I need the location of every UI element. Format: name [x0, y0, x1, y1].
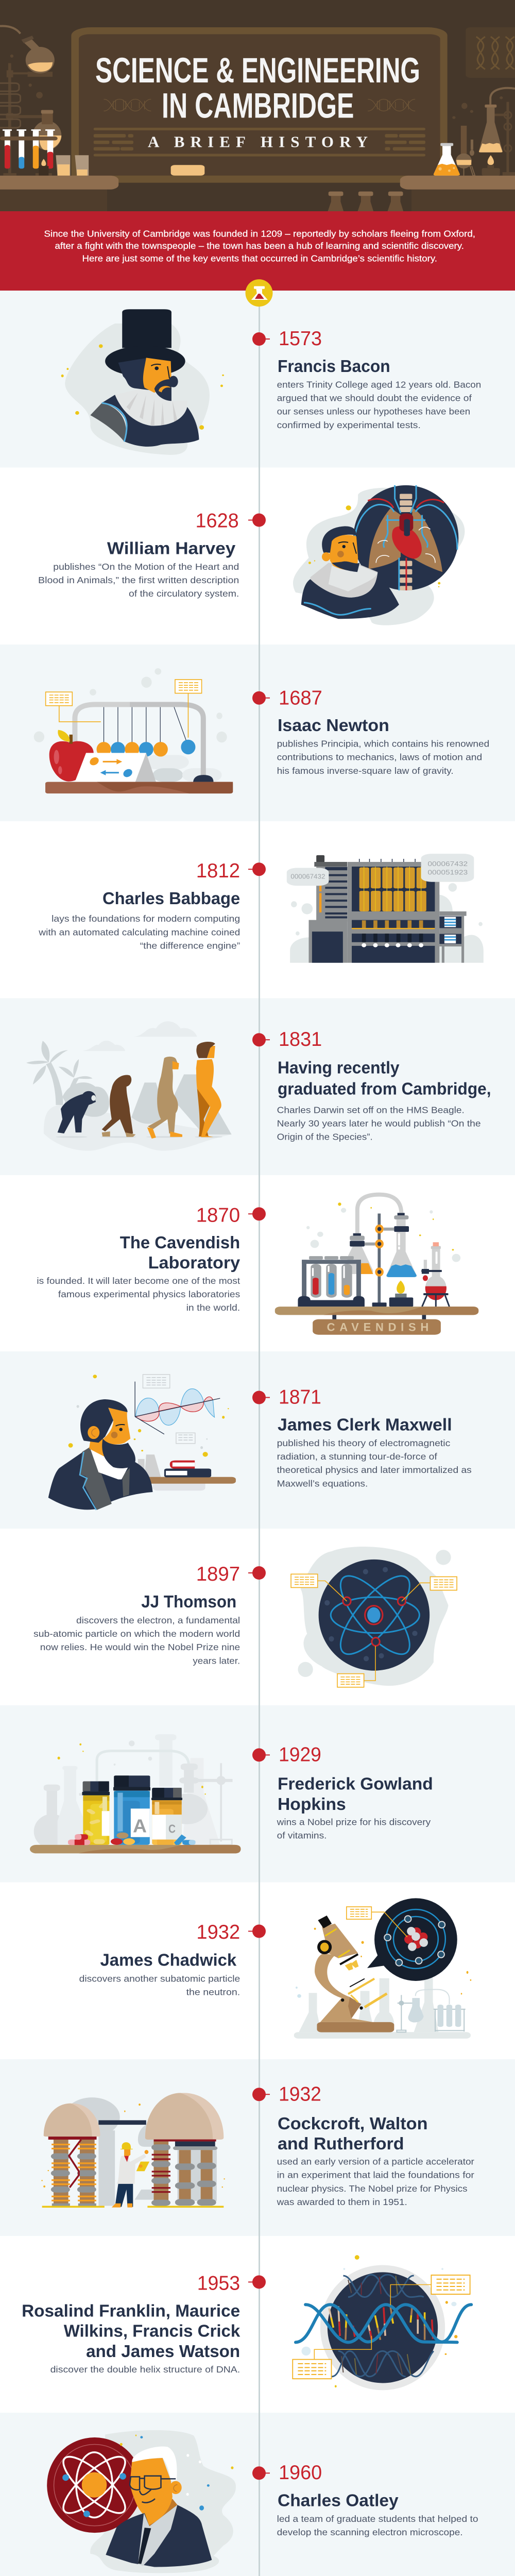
- title: [95, 50, 420, 126]
- icon: timeline dot: [248, 862, 266, 876]
- text block: enters Trinity College aged 12 years old. Bacon: [277, 379, 481, 389]
- text block: lays the foundations for modern computing: [52, 913, 240, 924]
- text block: theoretical physics and later immortalized as: [277, 1465, 472, 1475]
- left apparatus: [0, 26, 21, 33]
- panel: 1573 Francis Bacon: [61, 309, 481, 455]
- icon: timeline dot: [252, 2088, 270, 2101]
- text block: sub-atomic particle on which the modern world: [33, 1629, 240, 1639]
- text block: Origin of the Species”.: [277, 1132, 373, 1142]
- year: 1573: [279, 328, 322, 350]
- text block: [277, 739, 489, 776]
- heading: Wilkins, Francis Crick: [64, 2321, 241, 2341]
- year: 1687: [279, 687, 322, 709]
- text block: in the world.: [186, 1302, 240, 1313]
- icon: timeline start flask pin: [245, 279, 273, 307]
- year: 1932: [279, 2083, 321, 2105]
- illustration: laboratory apparatus on shelf: CAVENDISH: [327, 1321, 428, 1334]
- heading: Having recently: [278, 1058, 400, 1077]
- text block: [277, 1817, 431, 1841]
- heading: JJ Thomson: [141, 1592, 236, 1611]
- intro text: Since the University of Cambridge was founded in 1209 – reportedly by scholars fleeing from Oxford,: [44, 229, 475, 239]
- header: lab scene with chalkboard: [0, 0, 515, 211]
- panel: 1932 Cockcroft, Walton and Rutherford: [41, 2083, 474, 2208]
- icon: timeline dot: [248, 1207, 266, 1221]
- floor and benches: [0, 183, 515, 211]
- icon: timeline dot: [248, 2275, 266, 2289]
- text block: discover the double helix structure of DNA.: [50, 2364, 240, 2375]
- heading: Hopkins: [278, 1794, 346, 1814]
- illustration: James Clerk Maxwell and electromagnetic wave: [48, 1375, 236, 1510]
- text block: nuclear physics. The Nobel prize for Physics: [277, 2183, 468, 2194]
- illustration: Francis Bacon portrait: [61, 309, 224, 455]
- heading: and James Watson: [86, 2342, 240, 2361]
- text block: publishes “On the Motion of the Heart and: [53, 562, 239, 572]
- intro text: Here are just some of the key events that occurred in Cambridge’s scientific history.: [82, 253, 437, 263]
- poster: [466, 27, 515, 78]
- text block: years later.: [193, 1655, 240, 1666]
- text block: used an early version of a particle accelerator: [277, 2157, 474, 2167]
- heading: The Cavendish: [120, 1233, 240, 1252]
- heading: Laboratory: [148, 1253, 241, 1272]
- year: 1932: [196, 1921, 240, 1943]
- year: 1871: [279, 1386, 321, 1408]
- illustration: particle accelerator with scientist: [41, 2093, 225, 2208]
- heading: Isaac Newton: [278, 716, 389, 735]
- text block: published his theory of electromagnetic: [277, 1438, 451, 1448]
- text block: led a team of graduate students that helped to: [277, 2514, 478, 2524]
- heading: James Chadwick: [100, 1951, 237, 1970]
- text block: of vitamins.: [277, 1831, 327, 1841]
- heading: [278, 1058, 491, 1098]
- icon: timeline dot: [252, 1033, 270, 1046]
- heading: graduated from Cambridge,: [278, 1079, 491, 1098]
- heading: Frederick Gowland: [278, 1774, 433, 1793]
- text block: argued that we should doubt the evidence of: [277, 393, 472, 403]
- text block: is founded. It will later become one of the most: [37, 1276, 240, 1286]
- text block: wins a Nobel prize for his discovery: [277, 1817, 431, 1827]
- illustration: microscope and atom bubble: [294, 1898, 471, 2039]
- heading: William Harvey: [107, 539, 236, 557]
- panel: 1897 JJ Thomson: [33, 1547, 457, 1687]
- heading: James Clerk Maxwell: [278, 1415, 452, 1434]
- heading: [22, 2301, 241, 2361]
- text block: the neutron.: [186, 1987, 240, 1997]
- illustration: atom with electron orbits: [291, 1547, 457, 1687]
- text block: [38, 913, 240, 951]
- text block: develop the scanning electron microscope.: [277, 2527, 463, 2537]
- illustration: difference engine: [287, 854, 484, 963]
- illustration: DNA double helix: [293, 2255, 471, 2390]
- heading: and Rutherford: [278, 2134, 404, 2153]
- subtitle: A BRIEF HISTORY: [148, 133, 368, 150]
- icon: timeline dot: [248, 1925, 266, 1938]
- text block: [277, 2514, 478, 2537]
- icon: timeline dot: [248, 513, 266, 527]
- panel: 1687 Isaac Newton: [34, 668, 489, 793]
- panel: 1628 William Harvey: [38, 485, 465, 625]
- text block: [277, 379, 481, 430]
- year: 1628: [196, 510, 239, 532]
- illustration: difference engine: 000067432: [427, 860, 468, 868]
- icon: timeline dot: [252, 2466, 270, 2480]
- panel: 1960 Charles Oatley: [47, 2430, 478, 2573]
- panel: 1812 Charles Babbage: [38, 854, 484, 963]
- text block: now relies. He would win the Nobel Prize nine: [40, 1642, 240, 1652]
- timeline vertical line: [259, 304, 260, 2576]
- illustration: evolution of man: [26, 1021, 232, 1151]
- text block: discovers another subatomic particle: [79, 1973, 240, 1984]
- heading: Charles Oatley: [278, 2490, 399, 2510]
- text block: “the difference engine”: [140, 940, 240, 951]
- icon: timeline dot: [252, 1748, 270, 1761]
- heading: Cockcroft, Walton: [278, 2114, 427, 2133]
- year: 1960: [279, 2462, 322, 2484]
- text block: contributions to mechanics, laws of motion and: [277, 752, 482, 762]
- text block: Nearly 30 years later he would publish “On the: [277, 1118, 481, 1129]
- heading: [278, 2114, 427, 2153]
- icon: timeline dot: [252, 332, 270, 346]
- year: 1831: [279, 1028, 322, 1050]
- text block: [277, 1105, 481, 1142]
- heading: Francis Bacon: [278, 357, 390, 376]
- panel: 1831 Charles Darwin: [26, 1021, 491, 1151]
- icon: timeline dot: [252, 1391, 270, 1404]
- scientist: [112, 2142, 149, 2208]
- text block: [37, 1276, 240, 1313]
- text block: our senses unless our hypotheses have been: [277, 406, 470, 417]
- text block: of the circulatory system.: [129, 588, 239, 599]
- text block: was awarded to them in 1951.: [277, 2197, 407, 2207]
- year: 1929: [279, 1744, 321, 1766]
- heading: [278, 1774, 433, 1814]
- text block: radiation, a stunning tour-de-force of: [277, 1451, 437, 1462]
- panel: 1870 The Cavendish Laboratory: [37, 1195, 478, 1335]
- panel: 1929 Frederick Gowland Hopkins: [30, 1734, 433, 1853]
- illustration: vitamin bottles: A: [133, 1816, 147, 1837]
- intro text: after a fight with the townspeople – the town has been a hub of learning and scientific discovery.: [55, 241, 464, 251]
- text block: Charles Darwin set off on the HMS Beagle.: [277, 1105, 465, 1115]
- icon: timeline dot: [252, 691, 270, 705]
- illustration: William Harvey and circulatory system: [293, 485, 465, 625]
- text block: in an experiment that laid the foundations for: [277, 2170, 474, 2180]
- illustration: vitamin bottles: C: [168, 1822, 176, 1835]
- intro band: [0, 211, 515, 291]
- text block: Blood in Animals,” the first written description: [38, 575, 239, 585]
- text block: confirmed by experimental tests.: [277, 420, 421, 430]
- illustration: Newton's cradle and apple: [34, 668, 233, 793]
- title: IN CAMBRIDGE: [162, 86, 354, 126]
- heading: [120, 1233, 241, 1272]
- icon: timeline dot: [248, 1566, 266, 1580]
- right apparatus: [490, 88, 515, 105]
- panel: 1932 James Chadwick: [79, 1898, 471, 2039]
- text block: [38, 562, 239, 599]
- heading: Rosalind Franklin, Maurice: [22, 2301, 240, 2320]
- panel: 1953 Franklin, Wilkins, Crick and Watson: [22, 2255, 471, 2390]
- illustration: Charles Oatley with atom: [47, 2430, 236, 2573]
- year: 1870: [196, 1204, 240, 1226]
- illustration: difference engine: 000051923: [427, 869, 468, 876]
- text block: his famous inverse-square law of gravity.: [277, 766, 454, 776]
- heading: Charles Babbage: [102, 889, 240, 908]
- illustration: laboratory apparatus on shelf: [275, 1195, 478, 1335]
- illustration: difference engine: 000067432: [290, 872, 325, 880]
- illustration: vitamin bottles: [30, 1734, 241, 1853]
- erlenmeyer flask: [434, 146, 460, 176]
- text block: [277, 1438, 472, 1488]
- intro text: [44, 229, 475, 263]
- year: 1812: [196, 860, 240, 882]
- text block: [79, 1973, 240, 1997]
- text block: famous experimental physics laboratories: [58, 1289, 240, 1299]
- test tubes: [3, 129, 55, 159]
- text block: [277, 2157, 474, 2207]
- text block: publishes Principia, which contains his renowned: [277, 739, 489, 749]
- panel: 1871 James Clerk Maxwell: [48, 1375, 472, 1510]
- benches: [0, 176, 118, 190]
- year: 1953: [197, 2272, 240, 2294]
- year: 1897: [196, 1563, 240, 1585]
- text block: discovers the electron, a fundamental: [76, 1615, 240, 1625]
- chalkboard: [0, 26, 515, 211]
- text block: Maxwell’s equations.: [277, 1478, 368, 1488]
- text block: with an automated calculating machine coined: [38, 927, 240, 937]
- text block: [33, 1615, 240, 1666]
